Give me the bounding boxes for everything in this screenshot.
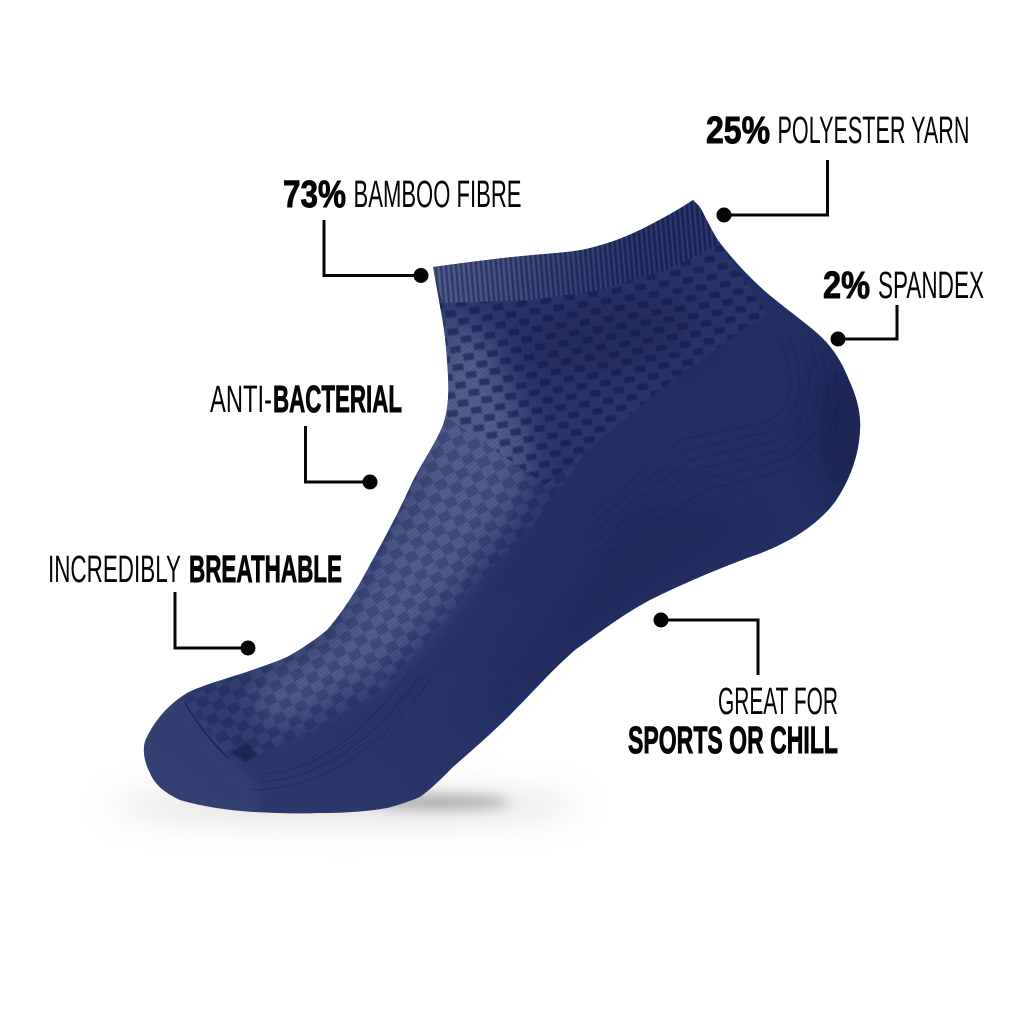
label: INCREDIBLY <box>48 549 181 591</box>
callout: 25% polyester yarn <box>706 110 828 222</box>
callout: 2% spandex <box>823 265 897 346</box>
dot <box>830 332 846 346</box>
label: ANTI- <box>210 379 272 421</box>
callout: 73% bamboo fibre <box>283 174 428 283</box>
sock floor shadow <box>110 790 580 822</box>
upper checker weave <box>440 246 764 484</box>
label: 25% <box>706 110 770 152</box>
leader line <box>324 220 421 276</box>
callout: anti-bacterial <box>210 379 378 490</box>
ribbed cuff <box>433 200 720 303</box>
dot <box>240 640 256 656</box>
dot <box>654 612 668 628</box>
label: breathable: BREATHABLE <box>189 549 342 591</box>
toe knit arcs <box>250 670 430 790</box>
label: GREAT FOR <box>718 681 838 723</box>
leader line <box>175 592 248 648</box>
toe cap <box>144 701 254 812</box>
toe dark check detail <box>232 742 258 762</box>
leg light area <box>250 310 530 730</box>
knit grain <box>130 190 870 820</box>
sole and arch shading <box>512 512 720 713</box>
heel shading <box>819 360 871 500</box>
label: bacterial: BACTERIAL <box>273 379 402 421</box>
leader line <box>306 426 370 482</box>
dot <box>716 208 732 222</box>
callout: great for sports or chill <box>654 612 838 723</box>
leader line <box>661 620 758 675</box>
instep dark area <box>532 298 687 373</box>
dot <box>414 268 428 283</box>
leg checker weave <box>225 418 582 746</box>
dot <box>362 474 378 490</box>
label: sports or chill: SPORTS OR CHILL <box>628 720 838 762</box>
callout: incredibly breathable <box>48 549 256 656</box>
illustration: navy ankle sock <box>130 190 871 820</box>
label: 2% <box>823 265 870 307</box>
leader line <box>838 305 897 339</box>
label: bamboo fibre: BAMBOO FIBRE <box>354 174 522 216</box>
heel knit arcs <box>590 338 837 565</box>
leader line <box>724 160 828 215</box>
label: 73% <box>283 174 346 216</box>
toe seam <box>185 702 228 758</box>
